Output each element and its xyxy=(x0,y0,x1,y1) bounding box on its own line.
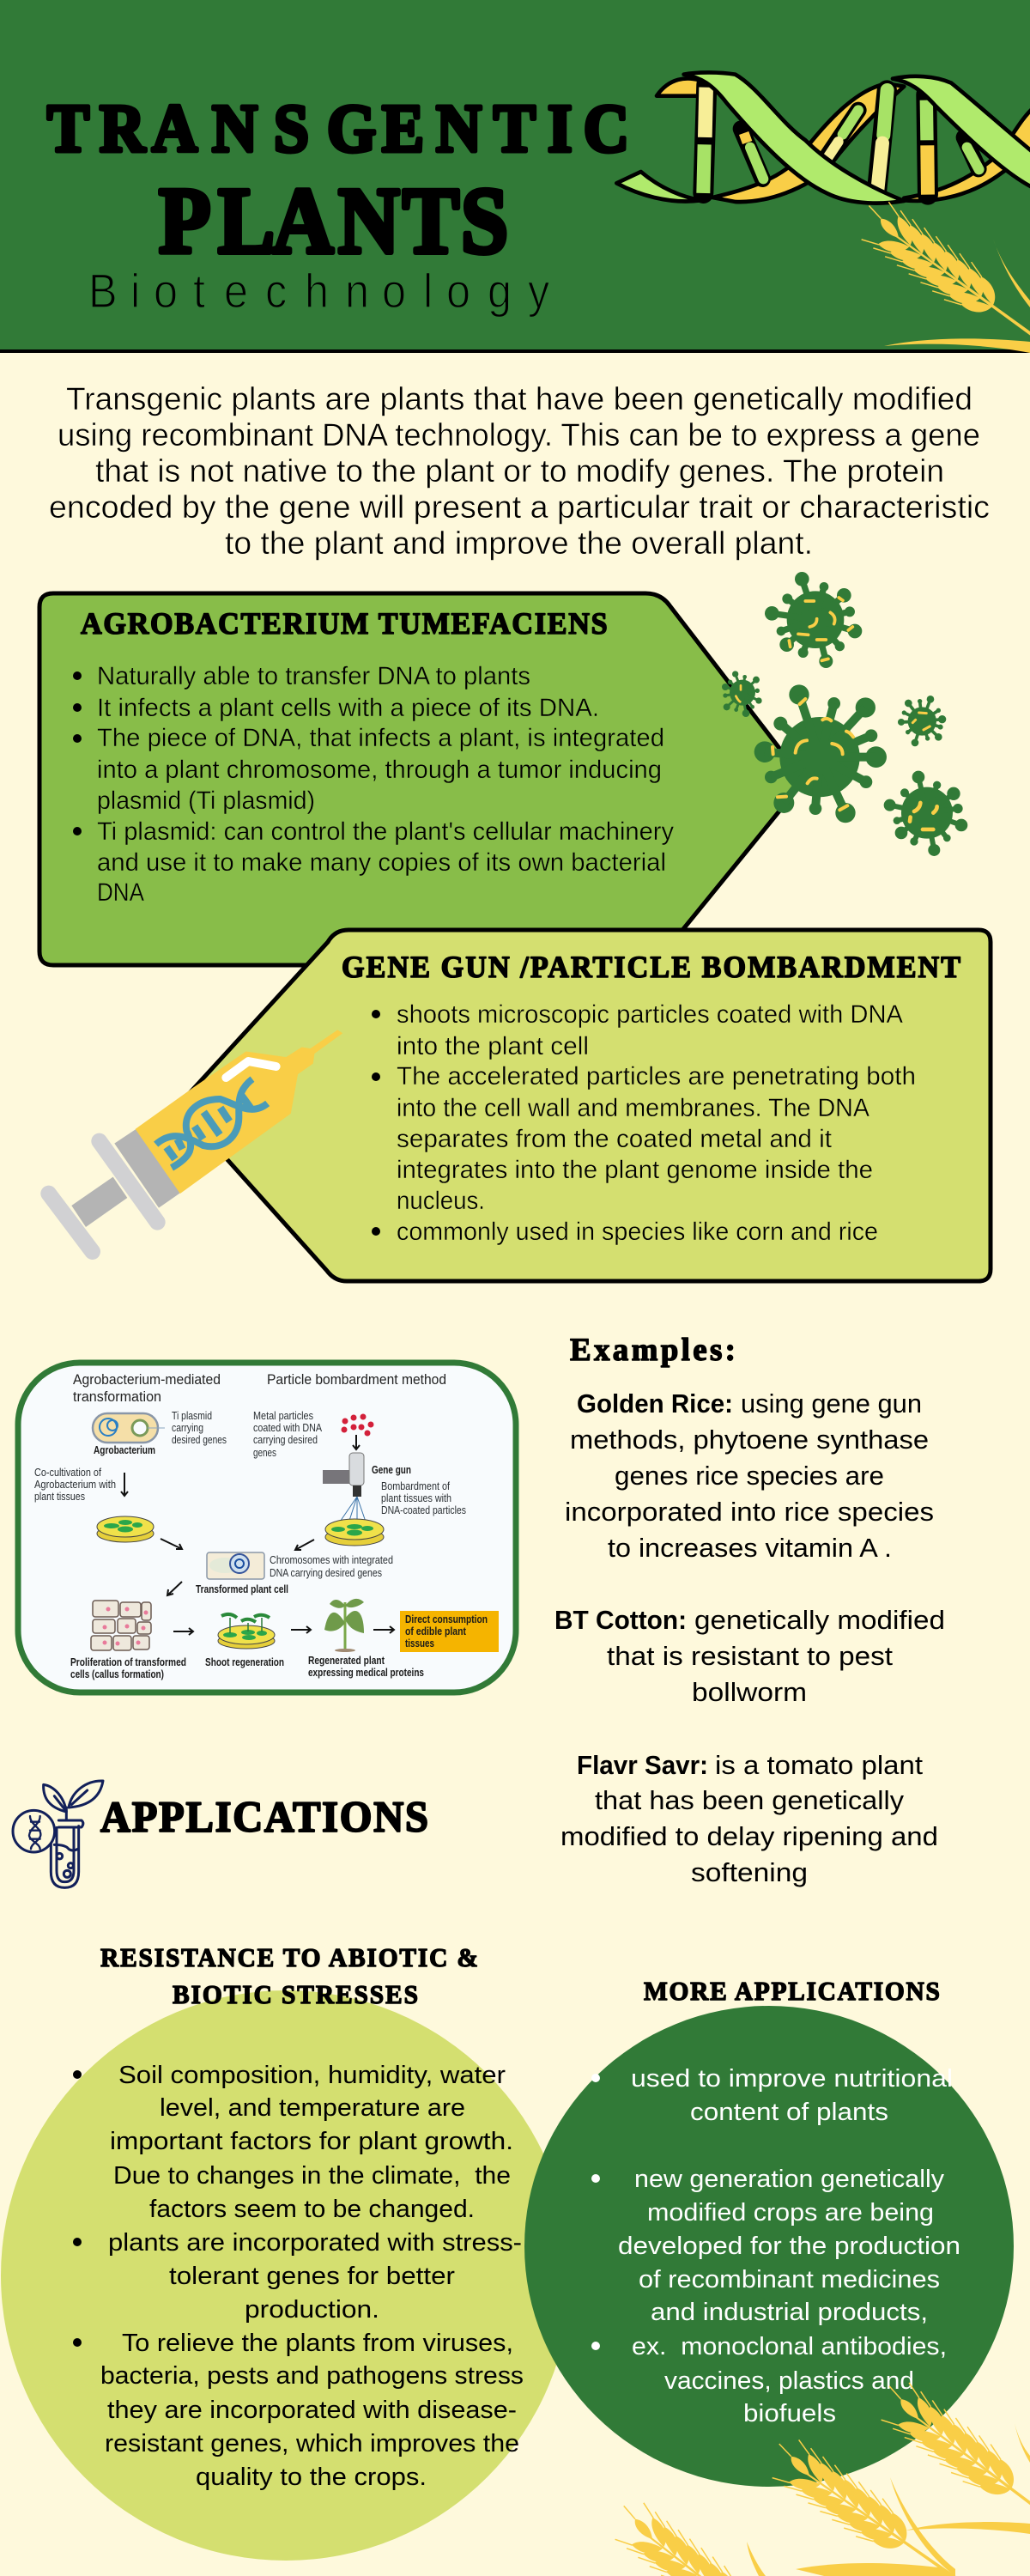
bullet list: more applications: vaccines, plastics and xyxy=(664,2367,914,2395)
diagram: labels: carrying desired xyxy=(253,1433,318,1446)
bullet list: more applications: modified crops are being xyxy=(647,2199,934,2227)
text block: golden rice example: genes rice species are xyxy=(615,1461,884,1491)
bullet list: resistance: level, and temperature are xyxy=(160,2094,465,2122)
diagram column titles: transformation xyxy=(73,1388,161,1405)
diagram: gene gun xyxy=(323,1453,367,1528)
diagram: labels: coated with DNA xyxy=(253,1421,322,1434)
text block: flavr savr example: softening xyxy=(691,1857,808,1887)
diagram: orange outcome box: tissues xyxy=(405,1637,434,1649)
virus: large centre xyxy=(754,684,887,823)
diagram: labels: DNA carrying desired genes xyxy=(270,1566,382,1579)
subtitle: biotechnology: Biotechnology xyxy=(88,265,550,319)
diagram: labels: Co-cultivation of xyxy=(34,1466,101,1479)
diagram: labels: Chromosomes with integrated xyxy=(270,1553,393,1566)
diagram: labels: Metal particles xyxy=(253,1409,313,1422)
diagram: labels: desired genes xyxy=(172,1433,227,1446)
text block: flavr savr example xyxy=(560,1750,938,1887)
bullet list: gene gun facts: separates from the coated metal and it xyxy=(397,1125,833,1153)
heading: resistance to abiotic and biotic stresses: BIOTIC STRESSES xyxy=(173,1979,418,2009)
bullet list: gene gun facts: into the plant cell xyxy=(397,1032,589,1060)
diagram: agrobacterium cell xyxy=(93,1413,165,1443)
panel: gene gun particle bombardment xyxy=(179,930,991,1281)
heading: gene gun: GENE GUN /PARTICLE BOMBARDMENT xyxy=(342,950,960,984)
diagram: metal particles xyxy=(342,1413,374,1436)
intro paragraph: that is not native to the plant or to modify genes. The protein xyxy=(95,453,944,489)
bullet list: resistance: quality to the crops. xyxy=(196,2464,427,2491)
bullet list: agrobacterium facts: The piece of DNA, that infects a plant, is integrated xyxy=(97,724,664,752)
diagram: petri dishes xyxy=(97,1516,384,1649)
bullet list: more applications: and industrial products, xyxy=(651,2299,928,2326)
icon: dna helix xyxy=(616,72,1030,204)
text block: flavr savr example: Flavr Savr: xyxy=(577,1750,708,1780)
bullet list: resistance: they are incorporated with disease- xyxy=(107,2397,517,2424)
diagram: labels: DNA-coated particles xyxy=(381,1504,466,1516)
header banner xyxy=(0,0,1030,362)
icon: syringe with dna xyxy=(49,1030,342,1252)
panel: agrobacterium tumefaciens xyxy=(39,593,804,965)
diagram column titles: Particle bombardment method xyxy=(267,1371,446,1388)
bullet list: more applications: used to improve nutritional xyxy=(631,2065,953,2093)
virus: small right xyxy=(898,696,946,746)
heading: resistance to abiotic and biotic stresses: RESISTANCE TO ABIOTIC & xyxy=(100,1942,478,1972)
text block: golden rice example xyxy=(565,1388,934,1563)
bullet list: resistance: important factors for plant growth. xyxy=(110,2128,513,2155)
diagram: labels: cells (callus formation) xyxy=(70,1668,164,1680)
diagram: arrows xyxy=(121,1435,394,1635)
diagram: labels: Gene gun xyxy=(372,1463,411,1476)
virus: lower right xyxy=(884,771,967,856)
diagram: labels: Regenerated plant xyxy=(308,1654,385,1667)
text block: bt cotton example xyxy=(554,1605,945,1707)
diagram: labels: Proliferation of transformed xyxy=(70,1656,186,1668)
title: transgentic: TRANSGENTIC xyxy=(47,91,629,167)
text block: bt cotton example: that is resistant to pest xyxy=(607,1641,893,1671)
diagram: labels: Agrobacterium xyxy=(94,1443,155,1456)
bullet list: resistance xyxy=(73,2062,524,2491)
diagram: labels: Transformed plant cell xyxy=(196,1583,288,1595)
bullet list: gene gun facts: commonly used in species like corn and rice xyxy=(397,1218,878,1246)
bullet list: resistance: resistant genes, which improves the xyxy=(105,2430,519,2458)
bullet list: more applications: of recombinant medicines xyxy=(639,2266,940,2293)
diagram: labels: Ti plasmid xyxy=(172,1409,212,1422)
bullet list: resistance: production. xyxy=(245,2296,379,2324)
icon: dna strand on syringe xyxy=(156,1079,268,1168)
bullet list: gene gun facts xyxy=(372,1000,916,1246)
bullet list: more applications xyxy=(591,2065,960,2427)
bullet list: agrobacterium facts: into a plant chromosome, through a tumor inducing xyxy=(97,756,662,784)
diagram: transformed plant cell xyxy=(207,1552,264,1579)
intro paragraph: using recombinant DNA technology. This can be to express a gene xyxy=(58,417,980,453)
heading: agrobacterium tumefaciens: AGROBACTERIUM TUMEFACIENS xyxy=(81,606,608,641)
diagram: labels: expressing medical proteins xyxy=(308,1666,424,1679)
text block: golden rice example: Golden Rice: xyxy=(577,1388,733,1419)
bullet list: resistance: Soil composition, humidity, water xyxy=(118,2062,506,2089)
intro paragraph: encoded by the gene will present a particular trait or characteristic xyxy=(49,489,990,525)
text block: golden rice example: incorporated into rice species xyxy=(565,1497,934,1527)
bullet list: resistance: factors seem to be changed. xyxy=(149,2196,475,2223)
diagram: labels: Shoot regeneration xyxy=(205,1656,284,1668)
heading: examples: Examples: xyxy=(570,1333,736,1368)
bullet list: agrobacterium facts: Ti plasmid: can control the plant's cellular machinery xyxy=(97,817,674,846)
icon: wheat bottom right xyxy=(604,2374,1030,2576)
diagram: orange outcome box: of edible plant xyxy=(405,1625,467,1637)
diagram: orange outcome box: Direct consumption xyxy=(405,1613,488,1625)
bullet list: resistance: tolerant genes for better xyxy=(169,2263,455,2290)
intro paragraph: Transgenic plants are plants that have been genetically modified xyxy=(66,381,972,416)
bullet list: resistance: Due to changes in the climate, the xyxy=(113,2162,511,2190)
bullet list: gene gun facts: The accelerated particles are penetrating both xyxy=(397,1062,916,1091)
text block: bt cotton example: bollworm xyxy=(692,1677,807,1707)
bullet list: resistance: plants are incorporated with stress- xyxy=(108,2229,522,2257)
diagram: labels: carrying xyxy=(172,1421,203,1434)
panel: resistance circle xyxy=(1,1942,571,2561)
bullet list: agrobacterium facts: DNA xyxy=(97,878,144,907)
panel: transformation diagram xyxy=(18,1363,516,1692)
bullet list: gene gun facts: into the cell wall and membranes. The DNA xyxy=(397,1094,869,1122)
diagram: labels: genes xyxy=(253,1446,276,1459)
bullet list: more applications: new generation genetically xyxy=(634,2166,945,2193)
text block: bt cotton example: genetically modified xyxy=(694,1605,945,1635)
icon: test tube with plant and dna xyxy=(13,1781,103,1887)
bullet list: agrobacterium facts: and use it to make many copies of its own bacterial xyxy=(97,848,666,877)
text block: bt cotton example: BT Cotton: xyxy=(554,1605,687,1635)
panel: more applications circle xyxy=(524,1976,1014,2487)
heading: resistance to abiotic and biotic stresses xyxy=(100,1942,478,2009)
virus: top xyxy=(765,572,862,668)
title: plants: PLANTS xyxy=(159,168,508,273)
bullet list: more applications: biofuels xyxy=(743,2400,836,2427)
bullet list: resistance: bacteria, pests and pathogens stress xyxy=(100,2362,524,2390)
bullet list: more applications: developed for the production xyxy=(618,2233,960,2260)
diagram: callus cells xyxy=(91,1601,151,1650)
text block: flavr savr example: modified to delay ripening and xyxy=(560,1821,938,1851)
bullet list: agrobacterium facts xyxy=(73,662,674,907)
text block: golden rice example: methods, phytoene synthase xyxy=(570,1425,929,1455)
heading: applications: APPLICATIONS xyxy=(100,1793,428,1841)
intro paragraph: to the plant and improve the overall plant. xyxy=(225,526,813,561)
diagram column titles xyxy=(73,1371,446,1405)
virus: small left xyxy=(722,671,762,717)
icons: green viruses xyxy=(722,572,967,856)
bullet list: resistance: To relieve the plants from viruses, xyxy=(122,2330,513,2357)
diagram: orange outcome box xyxy=(400,1611,499,1652)
text block: golden rice example: using gene gun xyxy=(741,1388,922,1419)
text block: flavr savr example: is a tomato plant xyxy=(715,1750,923,1780)
diagram column titles: Agrobacterium-mediated xyxy=(73,1371,221,1388)
text block: flavr savr example: that has been genetically xyxy=(595,1785,905,1815)
bullet list: more applications: content of plants xyxy=(690,2099,888,2126)
bullet list: agrobacterium facts: Naturally able to transfer DNA to plants xyxy=(97,662,530,690)
icon: wheat top right xyxy=(851,194,1030,362)
text block: golden rice example: to increases vitamin A . xyxy=(608,1533,892,1563)
bullet list: agrobacterium facts: It infects a plant cells with a piece of its DNA. xyxy=(97,694,599,722)
diagram: labels: plant tissues with xyxy=(381,1492,451,1504)
diagram: labels xyxy=(34,1409,466,1680)
diagram: labels: Bombardment of xyxy=(381,1479,450,1492)
diagram: regenerated plant xyxy=(324,1599,364,1652)
diagram: labels: Agrobacterium with xyxy=(34,1478,116,1491)
bullet list: more applications: ex. monoclonal antibodies, xyxy=(632,2333,947,2360)
intro paragraph xyxy=(49,381,990,561)
bullet list: gene gun facts: integrates into the plant genome inside the xyxy=(397,1156,873,1184)
bullet list: gene gun facts: nucleus. xyxy=(397,1187,485,1215)
bullet list: agrobacterium facts: plasmid (Ti plasmid) xyxy=(97,787,315,815)
bullet list: gene gun facts: shoots microscopic particles coated with DNA xyxy=(397,1000,903,1029)
heading: more applications: MORE APPLICATIONS xyxy=(644,1976,940,2006)
diagram: labels: plant tissues xyxy=(34,1490,85,1503)
